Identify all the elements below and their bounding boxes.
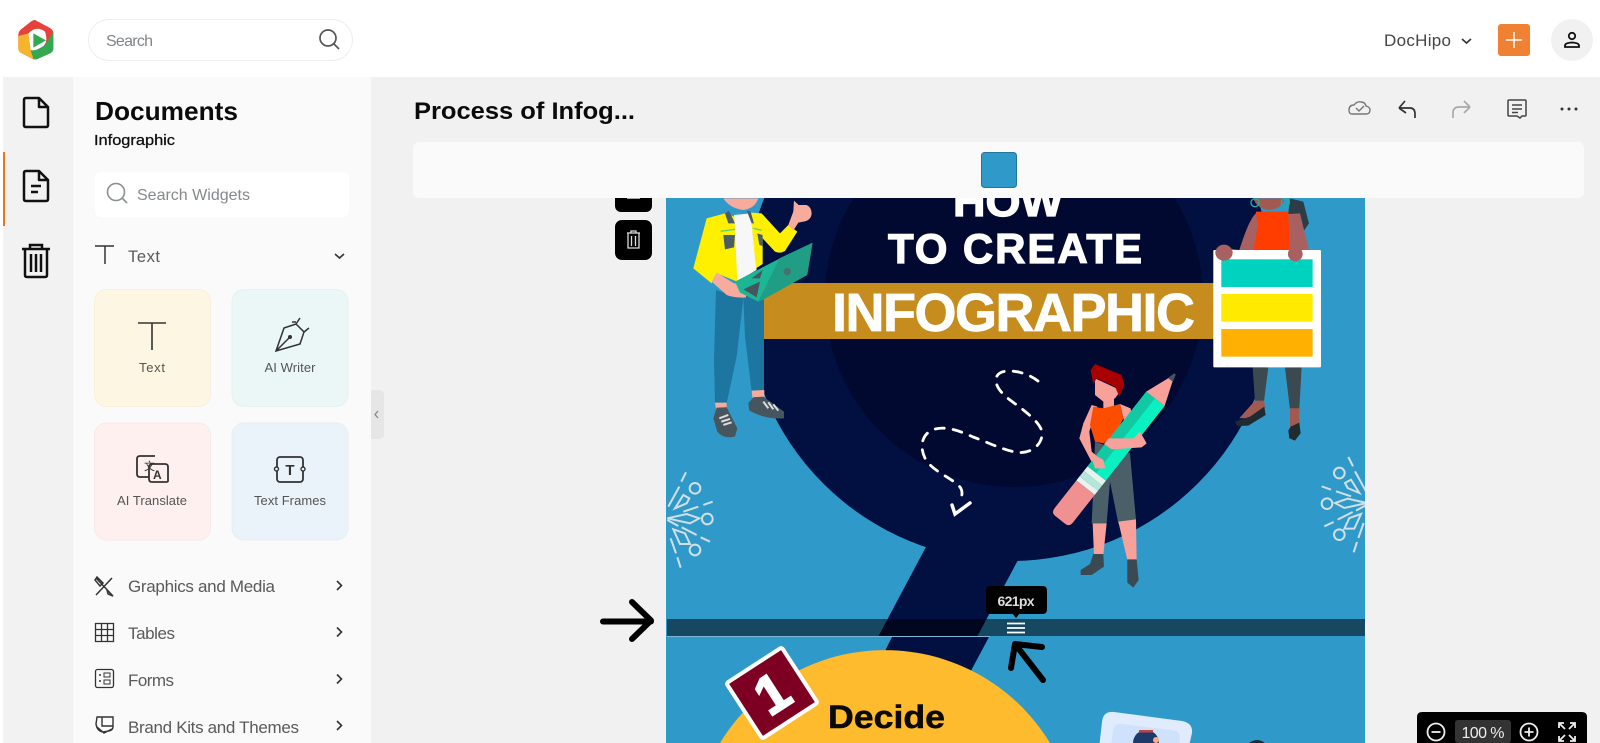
infographic canvas	[666, 198, 1365, 743]
icon: cloud saved	[1349, 102, 1370, 114]
menu: Tables	[96, 624, 342, 643]
magnifier lens outer	[746, 198, 1266, 561]
step one badge	[726, 647, 818, 739]
height tooltip	[986, 586, 1047, 618]
decoration: right burst	[1322, 457, 1367, 552]
icon rail	[3, 77, 73, 743]
card: Text Frames: Text Frames	[254, 493, 326, 508]
dashed path arrow	[922, 371, 1042, 514]
magnifier handle below split	[885, 637, 989, 670]
floating delete button	[615, 220, 652, 260]
widget search: Search Widgets	[137, 187, 250, 204]
menu: Forms: Forms	[128, 671, 174, 690]
add button	[1498, 24, 1530, 56]
zoom controls	[1417, 712, 1587, 743]
panel heading: Documents	[95, 96, 238, 126]
menu: Tables: Tables	[128, 624, 175, 643]
icon: trash	[22, 245, 50, 277]
icon: undo	[1399, 101, 1415, 118]
icon: comments	[1508, 100, 1526, 118]
colour swatch	[982, 152, 1016, 188]
panel subheading: Infographic	[94, 132, 176, 149]
height tooltip: 621px	[998, 593, 1035, 609]
menu: Brand Kits and Themes: Brand Kits and Themes	[128, 718, 299, 737]
step two icon card	[1100, 712, 1192, 743]
card: Text: Text	[139, 360, 165, 375]
card: Text Frames: T	[285, 462, 295, 479]
card: AI Writer: AI Writer	[264, 360, 316, 375]
account name: DocHipo	[1384, 31, 1451, 50]
menu: Forms	[96, 670, 342, 690]
illustration: girl holding pencil	[1051, 364, 1184, 588]
text section heading: Text	[128, 248, 160, 266]
card: AI Translate	[94, 423, 210, 540]
drag handle icon	[1007, 624, 1025, 632]
header search box	[88, 20, 352, 60]
icon: redo	[1453, 101, 1470, 118]
active indicator	[3, 152, 5, 226]
title line: HOW: HOW	[953, 178, 1063, 225]
side panel	[73, 77, 371, 743]
card: AI Translate: A	[153, 468, 162, 482]
text section heading	[95, 246, 344, 266]
illustration: man with laptop	[693, 198, 813, 437]
title line: INFOGRAPHIC: INFOGRAPHIC	[832, 283, 1195, 343]
partial dark element	[1249, 740, 1265, 743]
document toolbar icons	[1349, 100, 1578, 118]
card: AI Translate: 文	[144, 459, 155, 473]
menu: Brand Kits and Themes	[96, 717, 342, 737]
user avatar	[1551, 19, 1593, 61]
chart board	[1213, 250, 1321, 367]
step one heading: Decide	[828, 699, 945, 735]
illustration: woman holding chart board	[1213, 198, 1321, 441]
arrow: pointing at handle	[1011, 644, 1043, 680]
magnifier handle above split	[878, 545, 1018, 637]
step one badge: 1	[744, 660, 801, 727]
title line: TO CREATE: TO CREATE	[888, 225, 1142, 272]
zoom controls: 100 %	[1462, 725, 1504, 742]
document title: Process of Infog...	[414, 98, 635, 125]
floating black button top	[615, 180, 652, 212]
card: AI Writer	[232, 290, 348, 406]
header search box: Search	[106, 33, 153, 50]
title ribbon	[763, 283, 1215, 343]
icon: page	[24, 171, 48, 201]
decoration: left burst	[667, 472, 713, 568]
panel collapse handle	[371, 390, 384, 439]
card: Text	[94, 290, 210, 406]
card: Text Frames	[232, 423, 348, 540]
widget search	[95, 172, 349, 217]
top header bar	[18, 19, 1593, 61]
canvas toolbar	[413, 142, 1584, 198]
menu: Graphics and Media	[95, 577, 342, 596]
icon: more	[1560, 108, 1578, 110]
logo	[18, 20, 53, 59]
arrow: pointing at divider	[603, 602, 651, 639]
step one circle	[720, 650, 1050, 743]
card: AI Translate: AI Translate	[117, 493, 187, 508]
icon: documents	[24, 98, 48, 127]
magnifier lens inner	[826, 198, 1202, 487]
menu: Graphics and Media: Graphics and Media	[128, 577, 276, 596]
resize divider bar	[667, 619, 1365, 636]
